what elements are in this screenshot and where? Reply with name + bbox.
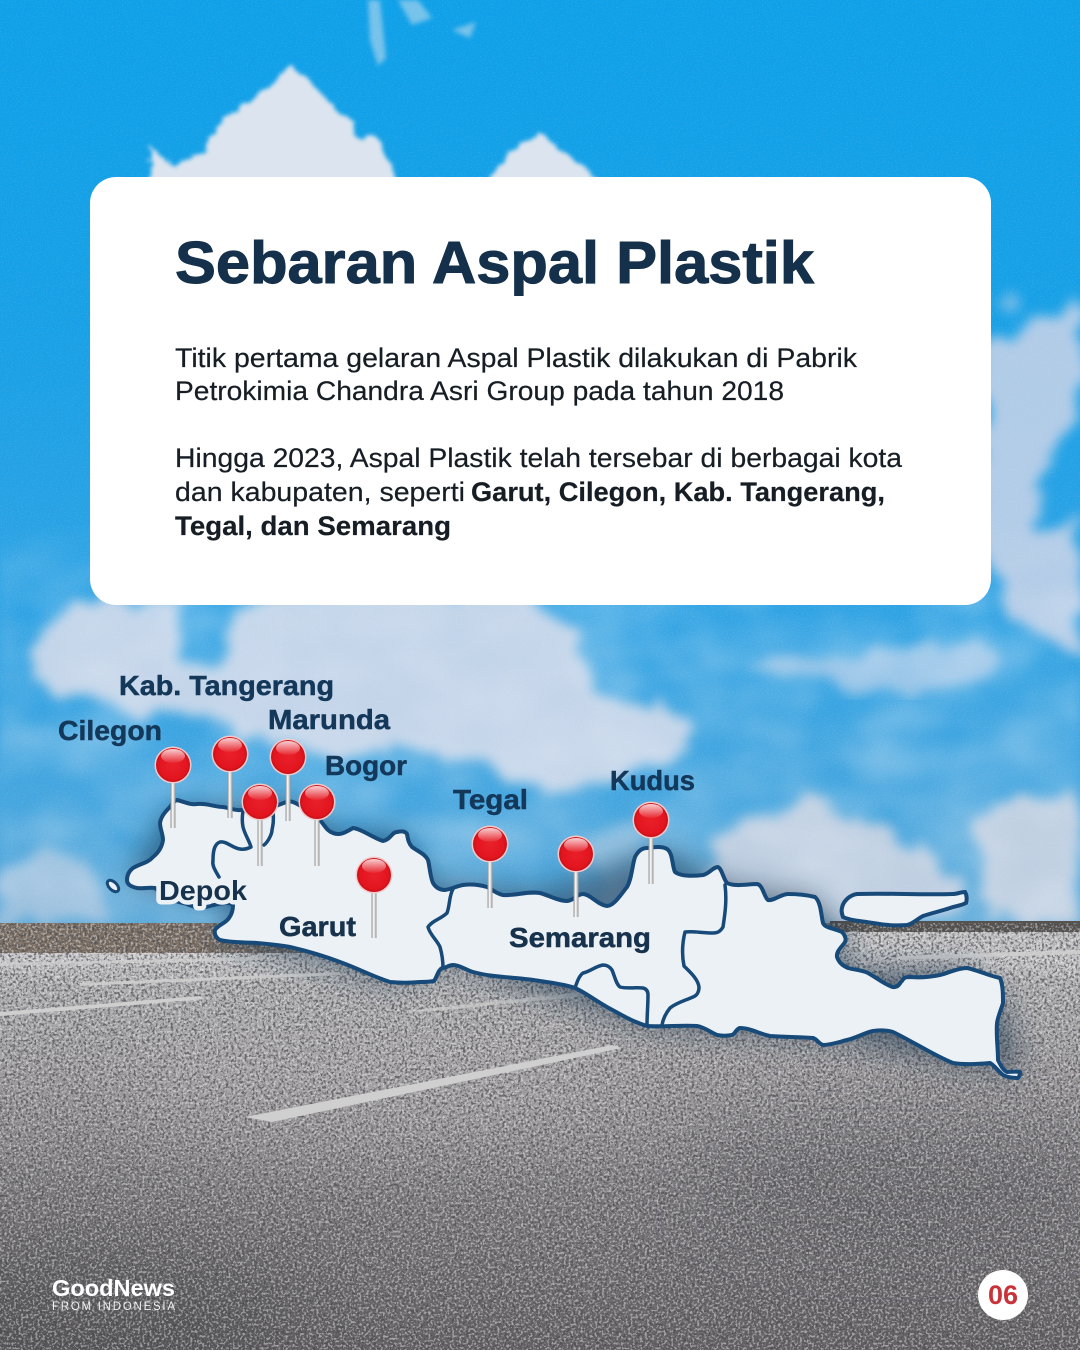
label: Cilegon: Cilegon xyxy=(58,715,162,746)
paragraph: first site xyxy=(175,343,858,406)
map shadow xyxy=(127,802,1020,1072)
pin: Garut xyxy=(356,856,392,938)
page number badge xyxy=(978,1270,1028,1320)
paragraph: spread to cities: Hingga 2023, Aspal Plastik telah tersebar di berbagai kota xyxy=(175,443,903,473)
logo: GoodNews from Indonesia: GoodNews xyxy=(52,1275,175,1301)
map: Madura island xyxy=(842,892,967,925)
clouds: right of card xyxy=(985,297,1080,660)
clouds: low left xyxy=(0,820,650,925)
page number badge: 06 xyxy=(988,1280,1018,1310)
pin: Cilegon xyxy=(154,746,192,828)
clouds: top xyxy=(150,0,612,190)
pin: Semarang xyxy=(558,836,594,917)
paragraph: first site: Titik pertama gelaran Aspal Plastik dilakukan di Pabrik xyxy=(175,343,858,373)
sky mottling xyxy=(0,520,1080,925)
clouds: low right xyxy=(700,790,1080,925)
label: Kab. Tangerang: Kab. Tangerang xyxy=(119,670,334,701)
logo: GoodNews from Indonesia xyxy=(52,1275,175,1313)
logo: GoodNews from Indonesia: FROM INDONESIA xyxy=(52,1301,175,1313)
background: road xyxy=(0,921,1080,1350)
pin: Kab. Tangerang xyxy=(212,736,248,818)
label: Garut: Garut xyxy=(279,911,356,942)
map: Java island xyxy=(105,800,1020,1078)
pin: Tegal xyxy=(472,826,508,908)
label: Tegal: Tegal xyxy=(453,784,528,815)
clouds: wispy right xyxy=(745,640,1000,690)
pin: Kudus xyxy=(632,802,670,884)
map labels xyxy=(58,670,695,953)
pin: Marunda xyxy=(270,738,306,821)
map: small island xyxy=(105,878,121,894)
label: Semarang: Semarang xyxy=(509,922,651,953)
map mainland xyxy=(127,800,1020,1078)
label: Bogor: Bogor xyxy=(325,750,407,781)
roadside wall xyxy=(0,923,1080,956)
road markings xyxy=(0,950,1080,1122)
label: Kudus: Kudus xyxy=(610,765,695,796)
panel: intro card xyxy=(90,177,991,605)
clouds: middle band xyxy=(30,590,690,790)
paragraph: spread to cities: dan kabupaten, seperti xyxy=(175,477,465,507)
map: province borders xyxy=(213,811,726,1025)
pin: Depok xyxy=(242,784,278,866)
pin: Bogor xyxy=(298,784,336,866)
background: sky xyxy=(0,0,1080,940)
paragraph: spread to cities xyxy=(175,443,903,541)
paragraph: spread to cities: Tegal, dan Semarang xyxy=(175,511,451,541)
road tone variation xyxy=(0,1020,1080,1350)
label: Depok: Depok xyxy=(159,875,247,906)
title: Sebaran Aspal Plastik xyxy=(175,230,814,296)
paragraph: first site: Petrokimia Chandra Asri Group pada tahun 2018 xyxy=(175,376,784,406)
paragraph: spread to cities: Garut, Cilegon, Kab. Tangerang, xyxy=(471,477,885,507)
label: Marunda: Marunda xyxy=(268,704,390,735)
